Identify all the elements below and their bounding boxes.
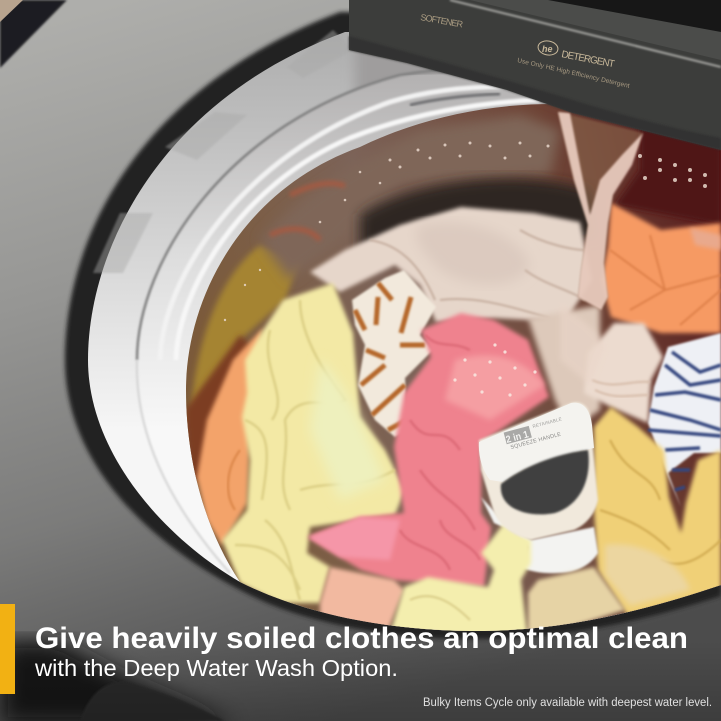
- falling water stream: [558, 112, 643, 385]
- pink cloth center: [308, 313, 549, 587]
- pale wet cloth under water: [528, 305, 600, 430]
- yellow accent bar: [0, 604, 15, 694]
- dark bottom-left shadow: [0, 640, 235, 721]
- subheading: with the Deep Water Wash Option.: [34, 655, 398, 681]
- ring tape patches: [93, 30, 353, 273]
- label: softener: SOFTENER: [420, 12, 464, 30]
- pale yellow cloth bottom: [388, 523, 531, 640]
- icon: he logo: [537, 39, 559, 57]
- dispenser label: [504, 416, 562, 451]
- footnote: Bulky Items Cycle only available with deepest water level.: [423, 697, 712, 709]
- striped orange and white shirt: [352, 270, 436, 437]
- yellow cloth right: [594, 407, 721, 616]
- bottom text scrim: [0, 640, 721, 721]
- label: detergent instruction: Use Only HE High Efficiency Detergent: [517, 57, 630, 90]
- perforated drum wall: [170, 90, 721, 640]
- detergent dispenser with handle: [479, 402, 598, 540]
- orange cloth left: [197, 328, 263, 545]
- tan cloth bottom: [528, 567, 625, 640]
- yellow cloth left: [222, 283, 405, 603]
- tub inner ring band: [137, 68, 721, 631]
- dispenser label: 2 in 1: [505, 429, 530, 446]
- cream lump right: [584, 323, 663, 423]
- tub opening dark rim: [65, 12, 721, 639]
- label: detergent: DETERGENT: [560, 49, 616, 70]
- water sparkles: [453, 343, 537, 397]
- tub outer ring: [88, 30, 721, 631]
- dispenser label: RETAINABLE: [532, 416, 562, 429]
- tub interior and clothes: [170, 90, 721, 640]
- orange pink cloth bottom: [320, 567, 404, 630]
- white dispenser base: [481, 497, 598, 573]
- cream shirt: [310, 207, 592, 322]
- detergent dispenser drawer panel: [349, 0, 721, 150]
- dispenser label: SQUEEZE HANDLE: [510, 432, 562, 451]
- headline: Give heavily soiled clothes an optimal clean: [35, 622, 688, 655]
- orange cloth right: [601, 203, 721, 333]
- dark corner object: [80, 682, 225, 721]
- blue striped shirt: [648, 333, 721, 507]
- icon: he logo: he: [542, 44, 553, 54]
